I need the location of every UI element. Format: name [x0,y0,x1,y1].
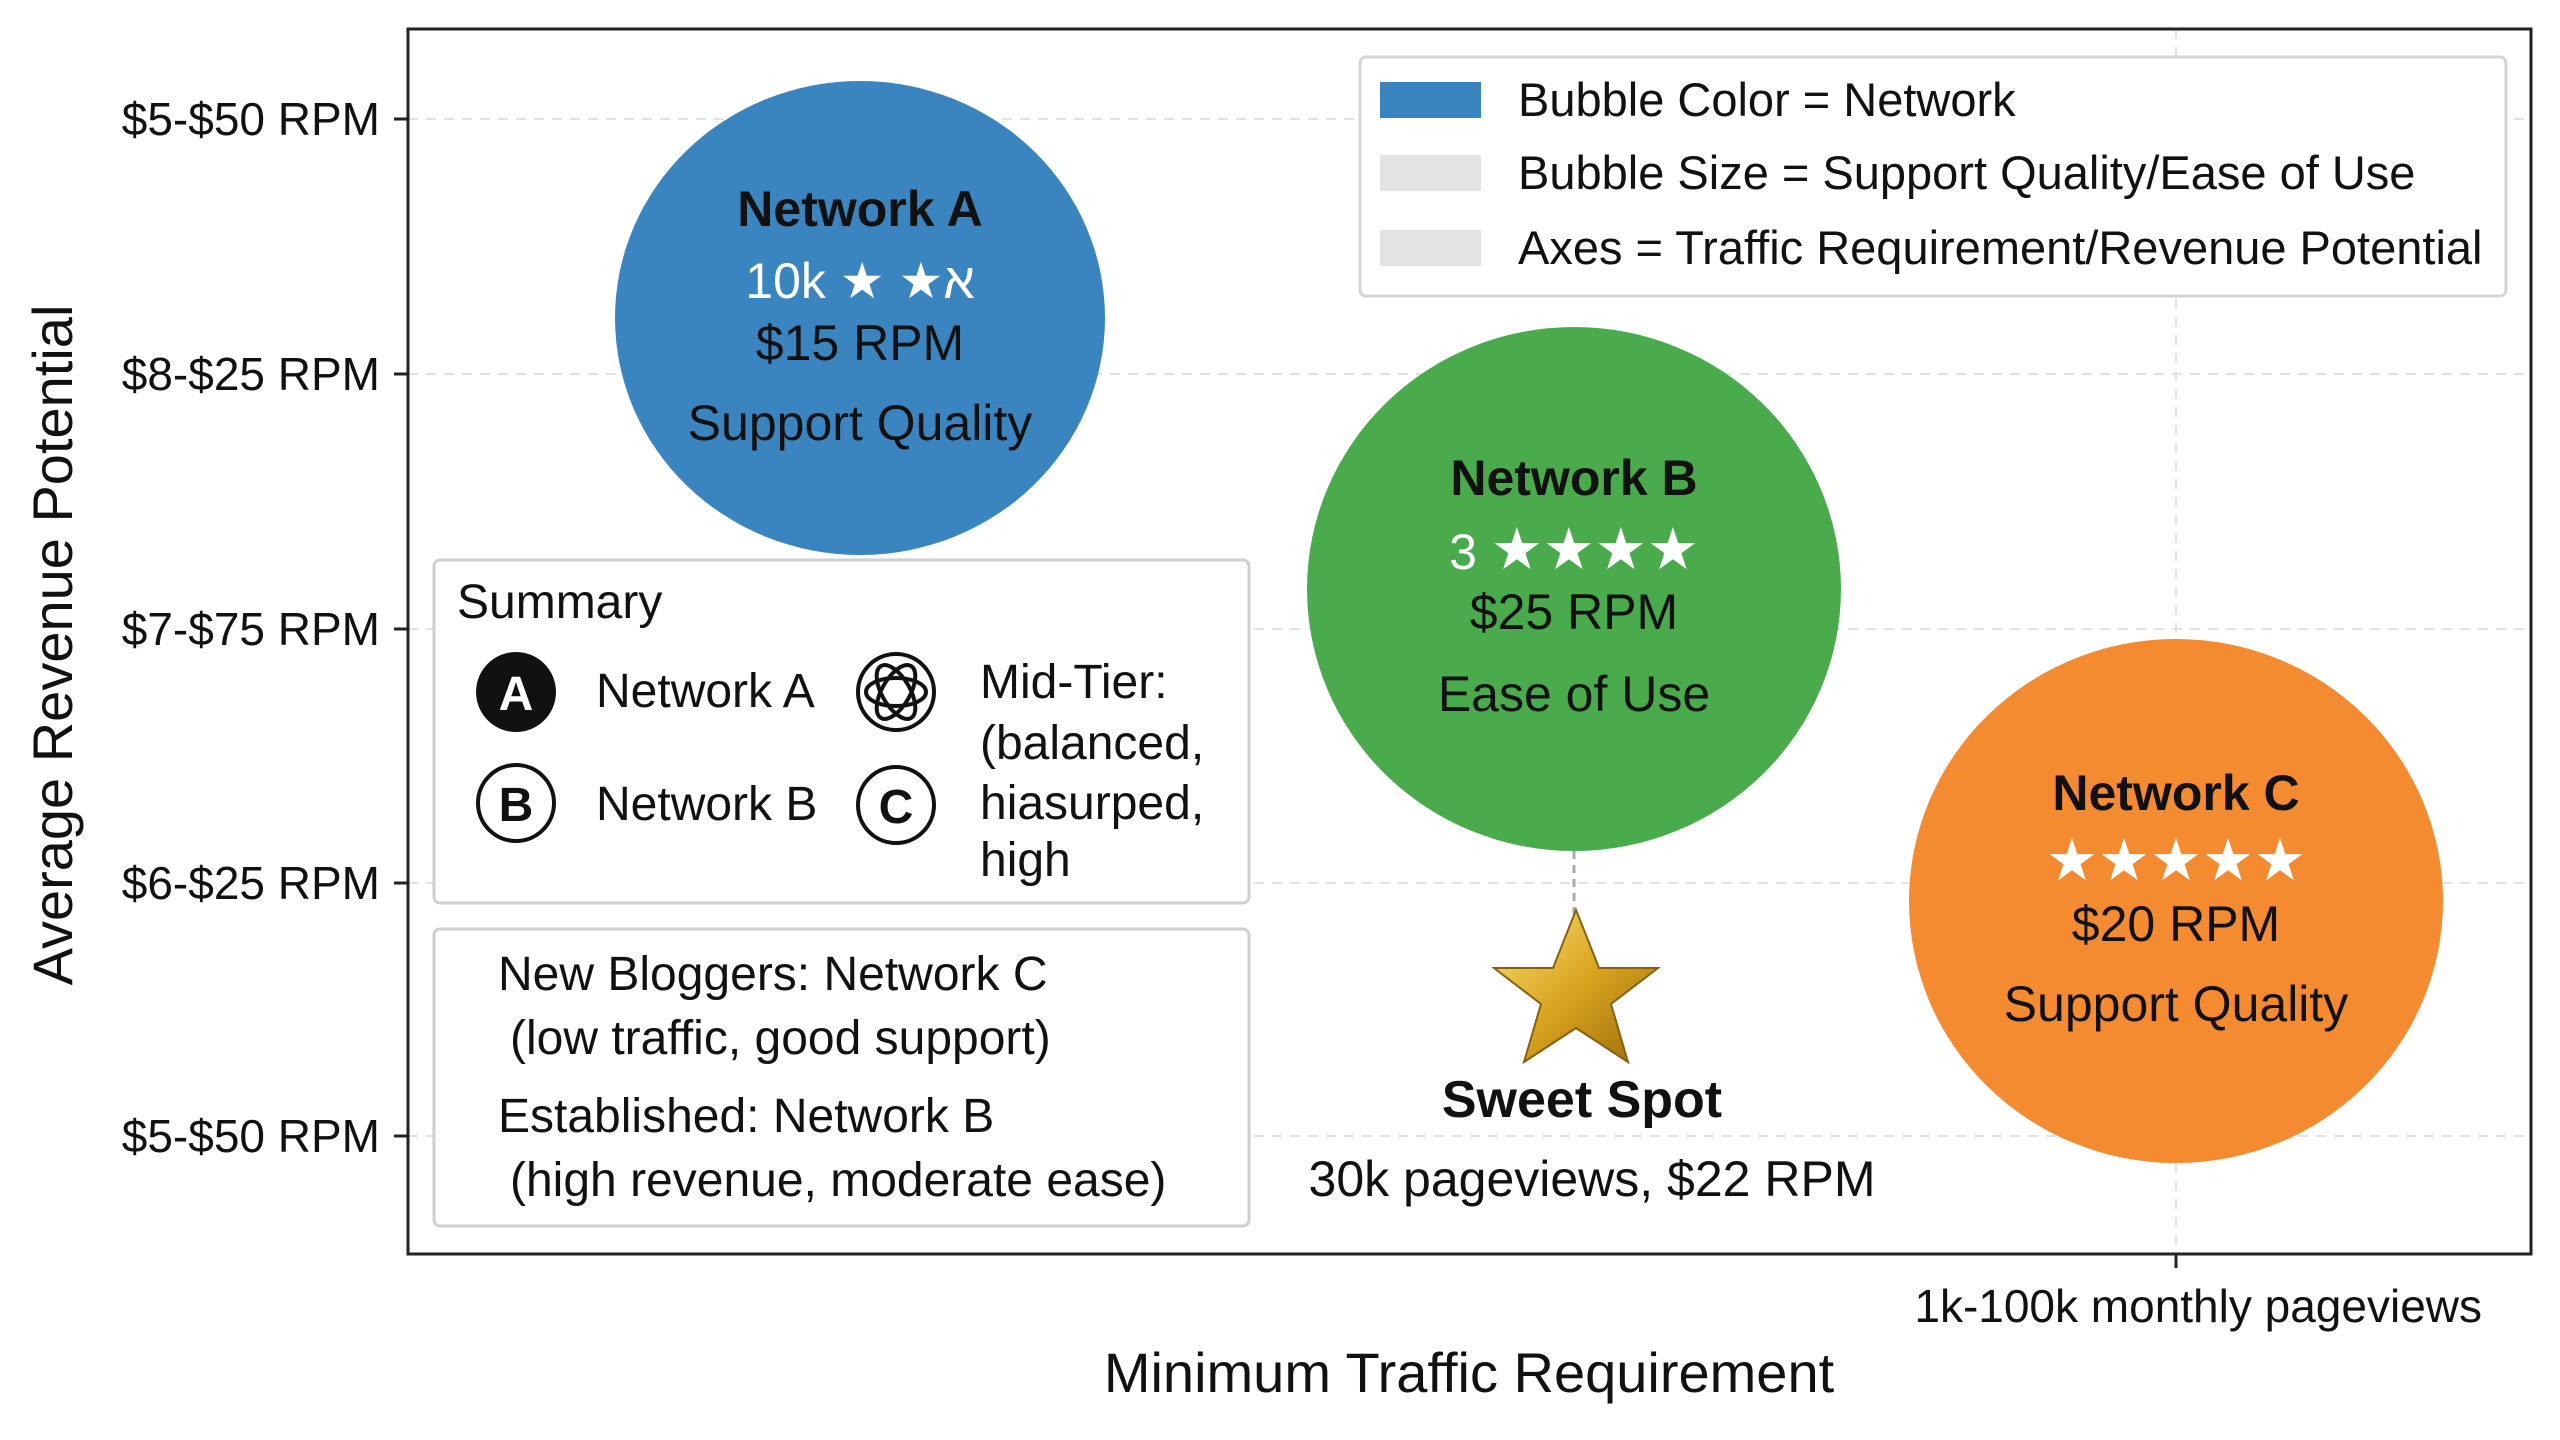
sweet spot label: Sweet Spot [1442,1071,1722,1129]
panel: recommendations: New Bloggers: Network C [498,948,1048,1001]
legend: Axes = Traffic Requirement/Revenue Potential [1518,221,2482,274]
y axis title: Average Revenue Potential [21,305,84,985]
bubble: Network B: 3 ★★★★ [1449,517,1699,582]
y axis ticks and labels: $5-$50 RPM [122,93,380,145]
panel: recommendations: Established: Network B [498,1090,994,1143]
legend: Bubble Size = Support Quality/Ease of Use [1518,146,2415,199]
bubble: Network C [1909,639,2443,1163]
x axis tick label: 1k-100k monthly pageviews [1914,1280,2482,1332]
panel: summary: high [980,834,1071,887]
y axis ticks and labels: $6-$25 RPM [122,857,380,909]
bubble: Network A: $15 RPM [756,315,964,371]
sweet spot label: 30k pageviews, $22 RPM [1309,1151,1875,1207]
icon: B badge [478,765,554,841]
icon: gold star [1494,910,1658,1062]
panel: recommendations: (high revenue, moderate ease) [510,1154,1166,1207]
x axis title: Minimum Traffic Requirement [1104,1341,1835,1404]
bubble: Network C: ★★★★★ [2046,828,2306,893]
panel: summary: hiasurped, [980,777,1204,830]
y axis ticks and labels: $8-$25 RPM [122,348,380,400]
legend [1360,57,2506,296]
legend: Bubble Color = Network [1518,73,2016,126]
panel: summary: Summary [457,576,662,629]
bubble: Network B: Network B [1450,450,1698,506]
sweet spot label [1309,1071,1875,1207]
icon: C badge [858,767,934,843]
plot frame [408,29,2531,1254]
bubble: Network A: 10k ★ ★א [745,253,975,309]
y axis ticks and labels [122,93,408,1162]
bubble: Network C: $20 RPM [2072,896,2280,952]
y axis ticks and labels: $5-$50 RPM [122,1110,380,1162]
grid lines [408,29,2531,1254]
bubble: Network B: $25 RPM [1470,584,1678,640]
icon: A badge [476,652,556,732]
panel: summary: Network B [596,778,817,831]
panel: summary: Network A [596,665,815,718]
panel: summary [434,560,1249,903]
icon: A badge: A [499,668,533,721]
bubble: Network B [1307,327,1841,851]
panel: recommendations: (low traffic, good support) [510,1012,1051,1065]
y axis ticks and labels: $7-$75 RPM [122,603,380,655]
bubble: Network C: Network C [2052,765,2300,821]
icon: knot [858,654,934,730]
bubble: Network A: Network A [737,181,983,237]
bubble: Network B: Ease of Use [1438,666,1710,722]
bubble: Network C: Support Quality [2004,976,2348,1032]
icon: B badge: B [499,779,533,832]
connector dashed line [1572,851,1576,914]
panel: summary: (balanced, [980,717,1204,770]
panel: summary: Mid-Tier: [980,656,1168,709]
bubble: Network A: Support Quality [688,395,1032,451]
panel: recommendations [434,929,1249,1226]
icon: C badge: C [879,781,913,834]
bubble: Network A [615,81,1105,555]
